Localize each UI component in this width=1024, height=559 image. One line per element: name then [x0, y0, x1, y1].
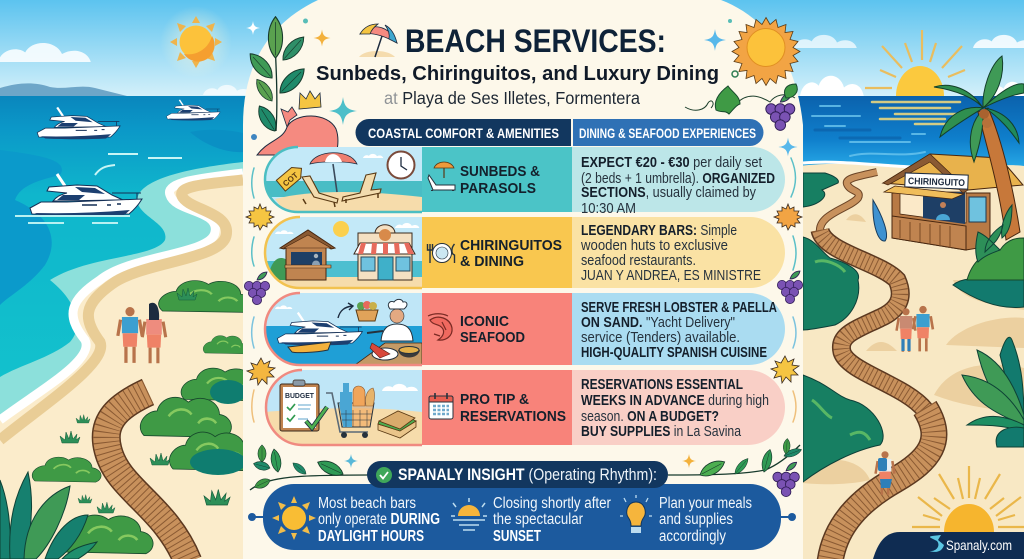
- left vine: [250, 445, 368, 491]
- icon: sunset: [451, 498, 487, 530]
- label block: dining: CHIRINGUITOS: [460, 237, 562, 254]
- chiringuito hut: [873, 154, 1023, 250]
- illustration: huts: [265, 217, 422, 288]
- title: BEACH SERVICES:: [405, 23, 666, 59]
- sea: [798, 96, 1024, 168]
- text panel: seafood: SERVE FRESH LOBSTER & PAELLA: [581, 299, 777, 316]
- left couple walking: [118, 303, 166, 363]
- text panel: reservations: [572, 370, 785, 445]
- price tag: [276, 163, 306, 191]
- row 1: sunbeds and parasols: [265, 147, 785, 217]
- text panel: dining: [572, 217, 785, 288]
- insight heading pill: [367, 461, 668, 488]
- text panel: sunbeds: EXPECT €20 - €30 per daily set: [581, 154, 763, 171]
- sea: [0, 96, 250, 426]
- label block: sunbeds: PARASOLS: [460, 180, 536, 197]
- left foreground leaves: [0, 472, 97, 559]
- cloud and hills: [0, 43, 252, 96]
- header: dining: DINING & SEAFOOD EXPERIENCES: [579, 126, 756, 141]
- lobster plate: [370, 343, 398, 360]
- illustration: budget and supplies: [265, 370, 422, 445]
- delivery arrow: [338, 303, 353, 318]
- left grapes: [244, 272, 270, 305]
- icon: sun: [272, 496, 316, 540]
- icon: light bulb: [620, 495, 652, 533]
- text panel: reservations: WEEKS IN ADVANCE during high: [581, 392, 769, 409]
- shopping cart: [326, 383, 375, 438]
- column headers: [356, 119, 764, 146]
- text panel: seafood: ON SAND. "Yacht Delivery": [581, 314, 735, 331]
- restaurant: [358, 233, 412, 280]
- illustration: yacht delivery: [265, 293, 422, 365]
- label block: seafood: [422, 293, 572, 365]
- text panel: reservations: BUY SUPPLIES in La Savina: [581, 423, 742, 440]
- left boardwalk: [106, 392, 188, 559]
- sand dunes: [803, 214, 1024, 484]
- text panel: dining: LEGENDARY BARS: Simple: [581, 222, 737, 239]
- right foreground leaves: [962, 337, 1024, 447]
- sparkles and dots on panel: [246, 18, 798, 156]
- logo mark: [929, 535, 944, 552]
- right boardwalk: [820, 172, 934, 559]
- text: plan meals: and supplies: [659, 511, 733, 528]
- palm tree: [934, 56, 1024, 240]
- icon: shrimp: [428, 314, 452, 340]
- location line: at Playa de Ses Illetes, Formentera: [384, 88, 640, 108]
- blue panel: [263, 484, 781, 550]
- clock: [388, 152, 414, 178]
- text panel: sunbeds: [572, 147, 785, 217]
- row 2: chiringuitos and dining: [265, 217, 785, 288]
- header: coastal comfort: COASTAL COMFORT & AMENITIES: [368, 126, 559, 141]
- price tag: COT: [281, 171, 300, 188]
- text: sunset: Closing shortly after: [493, 495, 611, 512]
- sandwich: [378, 411, 416, 438]
- connector dots: [248, 513, 796, 521]
- right couple walking: [897, 306, 933, 352]
- text: daylight: [318, 495, 440, 545]
- subtitle: Sunbeds, Chiringuitos, and Luxury Dining: [316, 62, 719, 85]
- hut: [286, 246, 326, 280]
- label block: seafood: ICONIC: [460, 313, 509, 330]
- label block: seafood: SEAFOOD: [460, 329, 525, 346]
- yacht large: [30, 174, 142, 217]
- label block: sunbeds: SUNBEDS &: [460, 163, 540, 180]
- sand: [798, 164, 1024, 559]
- left bushes and plants: [32, 281, 264, 554]
- chef: [367, 299, 413, 341]
- label block: dining: [422, 217, 572, 288]
- shallow water band: [0, 162, 243, 440]
- insight band: [248, 461, 796, 550]
- cloud right: [793, 35, 1024, 96]
- umbrella title icon: [359, 24, 397, 57]
- text panel: reservations: season. ON A BUDGET?: [581, 408, 719, 425]
- coral blob with crown leaves: [257, 91, 338, 155]
- icon: plate: [428, 244, 454, 263]
- left small sun: [246, 204, 274, 230]
- loungers: [302, 173, 381, 203]
- label block: dining: & DINING: [460, 253, 524, 270]
- parasol: [333, 164, 337, 192]
- text: sunset: SUNSET: [493, 528, 541, 545]
- text: sunset: the spectacular: [493, 511, 583, 528]
- insight heading pill: SPANALY INSIGHT (Operating Rhythm):: [398, 466, 657, 484]
- top left plant: [245, 17, 309, 134]
- rising sun: [865, 30, 965, 96]
- sun: [160, 6, 232, 78]
- right grapes: [777, 271, 803, 304]
- illustration: sunbeds: [265, 147, 422, 212]
- text: daylight: DAYLIGHT HOURS: [318, 528, 424, 545]
- text panel: sunbeds: 10:30 AM: [581, 200, 636, 217]
- right small sun: [774, 204, 802, 230]
- icon: sunbed: [428, 162, 455, 191]
- label block: reservations: [422, 370, 572, 445]
- lower vines: [250, 438, 803, 497]
- basket: [356, 301, 378, 321]
- yacht mid: [37, 107, 120, 139]
- label block: sunbeds: [422, 147, 572, 212]
- shoreline sand: [0, 173, 243, 559]
- right scene: sea, sun, beach: [793, 30, 1024, 559]
- left star: [247, 358, 275, 385]
- text: plan meals: accordingly: [659, 528, 726, 545]
- text: plan meals: [659, 495, 752, 545]
- text panel: sunbeds: SECTIONS, usually claimed by: [581, 184, 756, 201]
- footer badge: [873, 532, 1024, 559]
- yacht far: [166, 100, 220, 121]
- budget clipboard: [280, 380, 327, 431]
- lower right sun: [912, 466, 1024, 532]
- paella pan: [398, 346, 420, 358]
- text: sunset: [493, 495, 611, 545]
- hiker: [876, 451, 894, 495]
- top right sun: [732, 18, 800, 86]
- side ornaments: [244, 158, 803, 422]
- header: dining: [573, 119, 764, 146]
- text panel: dining: wooden huts to exclusive: [580, 237, 728, 254]
- background sky: [0, 0, 1024, 96]
- header: coastal comfort: [356, 119, 571, 146]
- text panel: seafood: [572, 293, 785, 365]
- label block: reservations: PRO TIP &: [460, 391, 529, 408]
- text panel: seafood: service (Tenders) available.: [581, 329, 740, 346]
- budget clipboard: BUDGET: [285, 391, 314, 400]
- text panel: sunbeds: (2 beds + 1 umbrella). ORGANIZED: [581, 170, 775, 187]
- text: daylight: only operate DURING: [318, 511, 440, 528]
- row 4: pro tip and reservations: [265, 370, 785, 445]
- bush beside hut: [967, 205, 1024, 280]
- central cream panel: [243, 0, 803, 559]
- label block: reservations: RESERVATIONS: [460, 408, 566, 425]
- hut sign: CHIRINGUITO: [908, 176, 965, 189]
- text: plan meals: Plan your meals: [659, 495, 752, 512]
- text panel: dining: JUAN Y ANDREA, ES MINISTRE: [581, 267, 761, 284]
- text panel: seafood: HIGH-QUALITY SPANISH CUISINE: [581, 344, 767, 361]
- text panel: reservations: RESERVATIONS ESSENTIAL: [581, 376, 743, 393]
- row 3: iconic seafood: [265, 293, 785, 365]
- tender boat: [288, 342, 331, 353]
- vine with grapes top right: [685, 84, 797, 130]
- left scene: sea, boats and beach: [0, 6, 252, 559]
- icon: calendar: [429, 393, 453, 419]
- text panel: dining: seafood restaurants.: [581, 252, 696, 269]
- footer badge: Spanaly.com: [946, 537, 1012, 553]
- right star: [771, 356, 799, 383]
- surfboard: [873, 200, 887, 241]
- text: daylight: Most beach bars: [318, 495, 416, 512]
- right bushes: [803, 173, 1024, 482]
- right vine: [668, 438, 803, 497]
